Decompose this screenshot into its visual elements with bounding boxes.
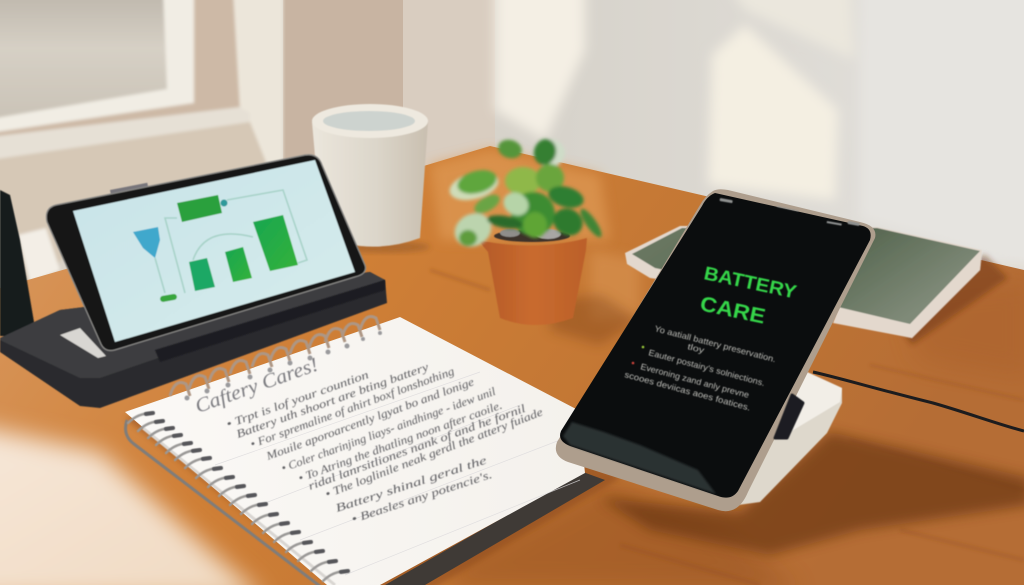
battery diagram xyxy=(133,190,307,302)
back tablet device xyxy=(625,226,1008,345)
status bar xyxy=(719,198,860,226)
handwritten notes: ridal lanrsitliones nank of and he fornil xyxy=(307,403,527,493)
wall background xyxy=(0,0,1024,320)
handwritten notes: Battery uth shoort are bting battery xyxy=(235,361,431,441)
charger connector xyxy=(775,395,803,438)
table glare xyxy=(0,425,265,585)
notebook cover edge xyxy=(385,472,605,585)
wooden table xyxy=(0,146,1024,585)
left phone xyxy=(46,155,385,362)
notebook page xyxy=(125,317,585,585)
handwritten notes: • The loglinile neak gerdl the attery fuiade xyxy=(324,406,545,501)
handwritten notes: Caftery Cares! xyxy=(192,354,321,418)
phone shadow on table xyxy=(600,432,1024,555)
handwritten notes: • Coler charinjing liays- aindhinge - idew unil xyxy=(280,386,497,475)
screen reflection xyxy=(563,422,716,494)
window and sill xyxy=(0,0,283,295)
phone body text: scooes deviicas aoes foatices. xyxy=(623,369,752,413)
phone body text: Everoning zand anly prevne xyxy=(639,361,751,400)
cable xyxy=(813,372,1024,431)
left spiral rings xyxy=(128,413,347,581)
top spiral rings xyxy=(170,316,380,396)
leaves xyxy=(446,137,605,253)
pot xyxy=(478,238,587,325)
phone screen xyxy=(73,160,355,342)
plant in terracotta pot xyxy=(446,137,605,325)
phone body text: Eauter postairy's solniections. xyxy=(647,347,766,388)
plant shadow xyxy=(550,295,640,345)
handwritten notes: • Trpt is lof your countion xyxy=(225,369,371,431)
handwritten notes: • To Atring the dhatling noon after caoile. xyxy=(297,400,504,485)
phone body text: tloy xyxy=(686,341,706,355)
heading: battery care: CARE xyxy=(698,292,767,329)
handwritten notes: • For spremaline of ahirt boxf lonshothing xyxy=(249,366,456,451)
handwritten notes: Mouile aporoarcently lgyat bo and lonige xyxy=(264,376,476,463)
handwritten notes: Battery shinal geral the xyxy=(334,455,488,515)
left phone stand xyxy=(0,190,387,408)
pale pillar xyxy=(233,0,283,172)
stand upright xyxy=(0,190,34,336)
handwritten notes: • Beasles any potencie's. xyxy=(350,469,494,526)
heading: battery care: BATTERY xyxy=(702,263,799,304)
handwritten notes xyxy=(192,354,545,526)
phone body text: Yo aatiall battery preservation. xyxy=(653,323,777,364)
wood shading xyxy=(440,480,800,585)
wood grain xyxy=(430,270,1024,585)
stand base xyxy=(0,272,387,408)
white wireless charger xyxy=(700,372,842,505)
ring tips xyxy=(146,413,348,572)
ring holes xyxy=(184,331,382,400)
notebook xyxy=(125,316,620,585)
heading: battery care xyxy=(698,263,799,329)
spiral wire xyxy=(126,420,335,585)
right phone xyxy=(556,189,875,511)
ceramic cup xyxy=(312,104,430,253)
phone body text xyxy=(623,323,777,413)
